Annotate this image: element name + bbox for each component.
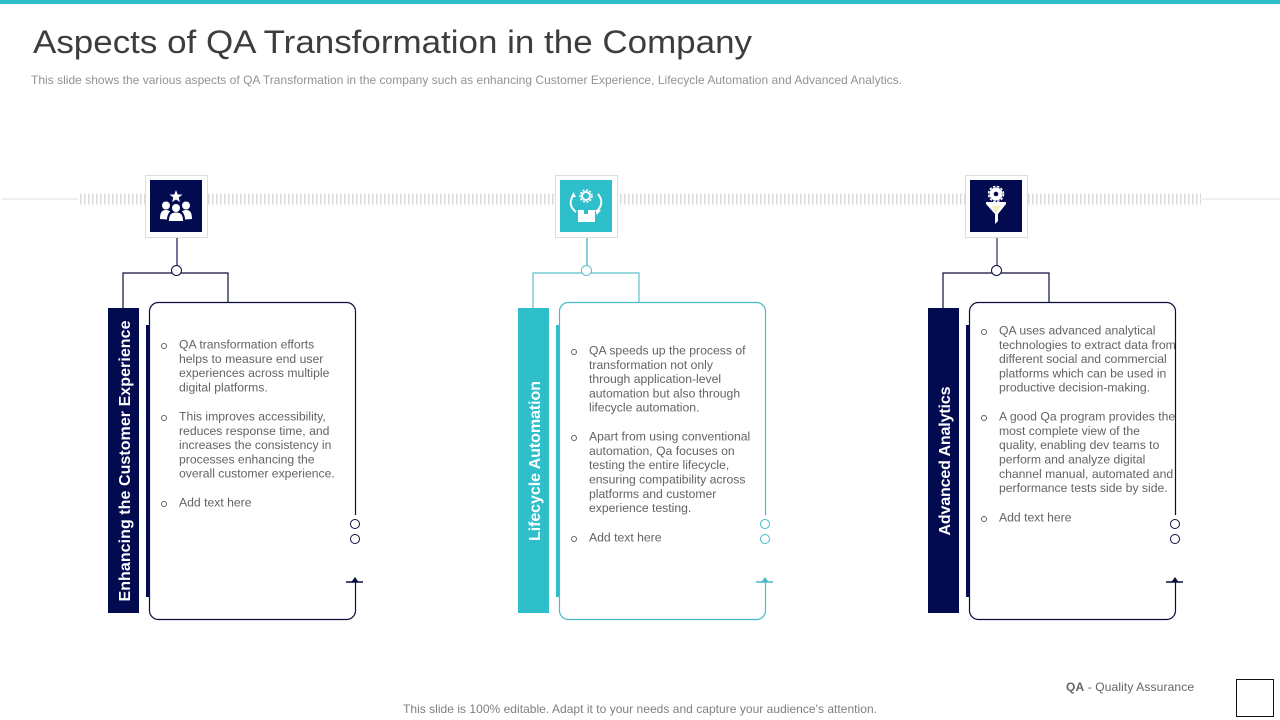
panel: Enhancing the Customer Experience bbox=[108, 176, 363, 620]
card text: testing the entire lifecycle, bbox=[589, 458, 729, 472]
card text: experience testing. bbox=[589, 501, 691, 515]
card text: through application-level bbox=[589, 372, 721, 386]
card text: QA transformation efforts bbox=[179, 338, 314, 352]
card text: platforms which can be used in bbox=[999, 366, 1166, 380]
card text: lifecycle automation. bbox=[589, 400, 699, 414]
connector bbox=[533, 238, 639, 308]
card text: most complete view of the bbox=[999, 424, 1140, 438]
card text: This improves accessibility, bbox=[179, 410, 326, 424]
card text bbox=[162, 338, 335, 510]
icon: team with star bbox=[146, 176, 208, 238]
connector bbox=[943, 238, 1049, 308]
footnote: QA abbreviation: QA - Quality Assurance bbox=[1066, 680, 1194, 694]
icon: lifecycle gear and box bbox=[556, 176, 618, 238]
card text: increases the consistency in bbox=[179, 438, 331, 452]
timeline band bbox=[2, 198, 1280, 200]
card text: helps to measure end user bbox=[179, 352, 323, 366]
logo placeholder box bbox=[1236, 680, 1274, 716]
card text: Add text here bbox=[179, 496, 252, 510]
subtitle: This slide shows the various aspects of QA Transformation in the company such as enhancing Customer Experience, Lifecycle Automation and Advanced Analytics. bbox=[31, 73, 902, 87]
card text: overall customer experience. bbox=[179, 466, 335, 480]
card text: digital platforms. bbox=[179, 380, 268, 394]
vertical heading: Advanced Analytics bbox=[937, 386, 954, 536]
card outline bbox=[148, 302, 363, 620]
card text: automation but also through bbox=[589, 386, 740, 400]
card text: QA uses advanced analytical bbox=[999, 324, 1156, 338]
card text: ensuring compatibility across bbox=[589, 472, 745, 486]
card text: different social and commercial bbox=[999, 352, 1167, 366]
panel: Lifecycle Automation bbox=[518, 176, 773, 620]
vertical heading bbox=[108, 308, 139, 613]
vertical heading bbox=[928, 308, 959, 613]
footer note: This slide is 100% editable. Adapt it to your needs and capture your audience's attention. bbox=[403, 702, 877, 716]
card text: performance tests side by side. bbox=[999, 481, 1168, 495]
card text: Apart from using conventional bbox=[589, 430, 750, 444]
card text: Add text here bbox=[999, 510, 1072, 524]
card text: channel manual, automated and bbox=[999, 467, 1173, 481]
card outline bbox=[558, 302, 773, 620]
card text: transformation not only bbox=[589, 358, 714, 372]
icon: gear and funnel bbox=[966, 176, 1028, 238]
title: Aspects of QA Transformation in the Company bbox=[33, 24, 752, 60]
panel: Advanced Analytics bbox=[928, 176, 1183, 620]
card text: A good Qa program provides the bbox=[999, 410, 1175, 424]
card text: QA speeds up the process of bbox=[589, 344, 746, 358]
card text: technologies to extract data from bbox=[999, 338, 1176, 352]
card text: productive decision-making. bbox=[999, 380, 1150, 394]
card text bbox=[572, 344, 750, 544]
card outline bbox=[968, 302, 1183, 620]
vertical heading bbox=[518, 308, 549, 613]
card text: processes enhancing the bbox=[179, 452, 315, 466]
vertical heading: Enhancing the Customer Experience bbox=[117, 320, 134, 602]
card text: automation, Qa focuses on bbox=[589, 444, 735, 458]
card text: quality, enabling dev teams to bbox=[999, 438, 1160, 452]
card text: experiences across multiple bbox=[179, 366, 330, 380]
top accent bar bbox=[0, 0, 1280, 4]
card text: Add text here bbox=[589, 530, 662, 544]
vertical heading: Lifecycle Automation bbox=[527, 381, 544, 541]
card text bbox=[982, 324, 1176, 524]
card text: platforms and customer bbox=[589, 487, 716, 501]
card text: reduces response time, and bbox=[179, 424, 329, 438]
card text: perform and analyze digital bbox=[999, 452, 1145, 466]
connector bbox=[123, 238, 228, 308]
